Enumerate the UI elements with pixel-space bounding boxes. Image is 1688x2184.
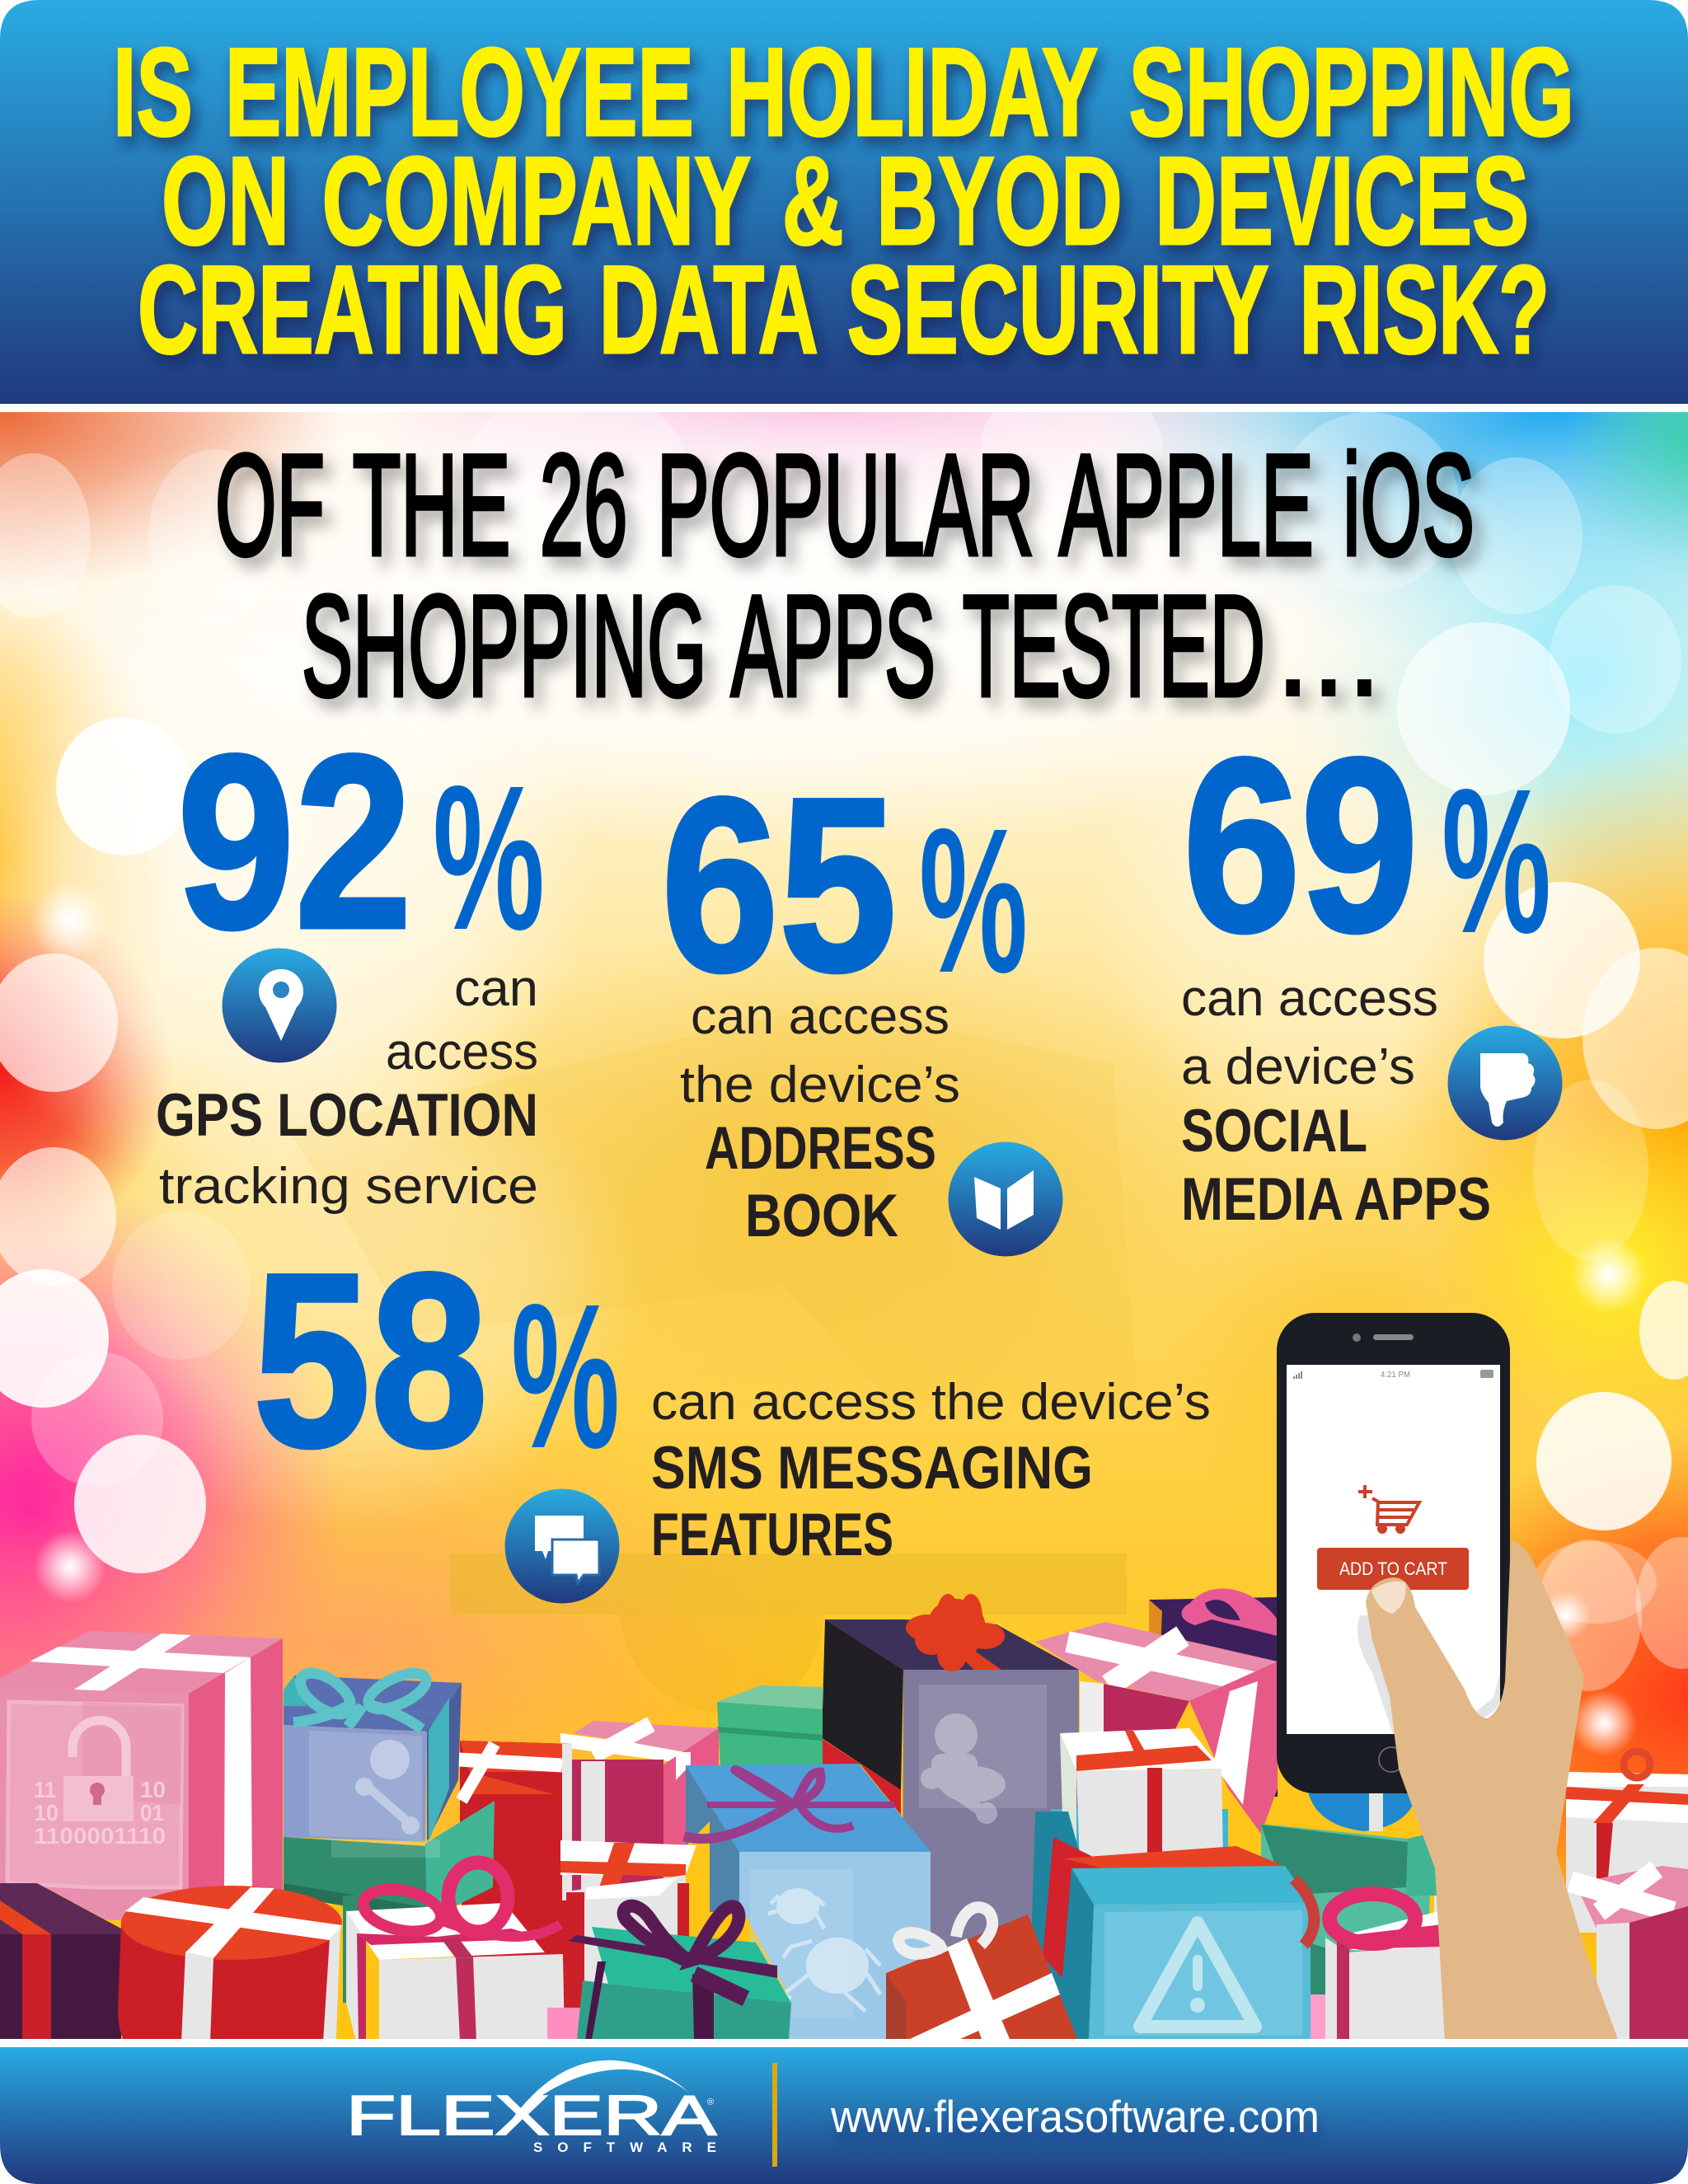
icon: spiders xyxy=(768,1888,880,2011)
icon: purple ribbon bow xyxy=(684,1769,894,1839)
icon: open padlock with binary: 10 xyxy=(140,1777,166,1802)
icon: pink bow xyxy=(359,1863,560,1938)
icon: shopping cart xyxy=(1358,1485,1419,1532)
panel: header band xyxy=(0,0,1688,404)
phone status bar xyxy=(1293,1370,1493,1380)
icon: chat bubbles xyxy=(504,1488,620,1604)
icon: purple bow xyxy=(624,1906,746,1999)
gift: green box purple bow xyxy=(568,1906,791,2040)
gift: purple box xyxy=(0,1883,121,2041)
gift: white pink-ribbon box right xyxy=(1294,1879,1451,2041)
illustration: hand xyxy=(1366,1540,1619,2041)
stat: 69 percent: % xyxy=(1442,746,1551,976)
icon: location pin xyxy=(223,948,336,1063)
stat: 58 percent: % xyxy=(511,1261,620,1491)
text: social media apps xyxy=(1181,970,1491,1233)
gift: blue spider box xyxy=(684,1764,931,2040)
stat: 69 percent xyxy=(1181,706,1563,1233)
illustration: phone xyxy=(1277,1313,1510,1793)
stat: 58 percent xyxy=(253,1221,1211,1604)
icon: teal bow xyxy=(293,1665,431,1729)
text: sms messaging xyxy=(651,1374,1211,1568)
stat: 65 percent: 65 xyxy=(661,746,897,1023)
heading: of the 26 apps: ... xyxy=(1275,566,1382,727)
gift: teal warning box xyxy=(1031,1811,1311,2040)
text: address book: BOOK xyxy=(745,1183,898,1249)
text: gps location: can xyxy=(454,960,538,1017)
stat: 69 percent: 69 xyxy=(1183,706,1418,983)
logo: flexera: SOFTWARE xyxy=(533,2139,716,2155)
gift: green back right xyxy=(1261,1824,1451,1978)
text: social media apps: a device’s xyxy=(1181,1038,1415,1095)
logo: flexera xyxy=(346,2060,717,2155)
gift: white box with red ribbon xyxy=(1051,1728,1228,1896)
icon: open padlock with binary xyxy=(34,1721,166,1849)
gift: white box right edge xyxy=(1566,1751,1688,1896)
panel: gift pile xyxy=(0,1589,1688,2041)
stat: 65 percent: % xyxy=(919,785,1028,1015)
thumb shadow xyxy=(1357,1615,1500,1734)
icon: open padlock with binary: 10 xyxy=(34,1800,59,1825)
title xyxy=(113,22,1574,380)
text: sms messaging: can access the device’s xyxy=(651,1374,1211,1431)
gift: green box under skull xyxy=(284,1801,495,2003)
icon: warning triangle xyxy=(1140,1923,1255,2027)
gift: filler shapes behind pile xyxy=(462,1896,1597,2039)
button: add to cart xyxy=(1317,1548,1469,1590)
thumbnail xyxy=(1372,1582,1405,1614)
stat: 92 percent xyxy=(156,703,545,1215)
gift: pink box with white ribbon xyxy=(1035,1622,1278,1834)
gift: pink crimson box xyxy=(560,1721,719,1901)
icon: book xyxy=(948,1142,1063,1256)
stat: 92 percent: 92 xyxy=(177,703,412,980)
gift: dark skull box xyxy=(821,1619,1079,1961)
button: add to cart: ADD TO CART xyxy=(1339,1558,1447,1579)
text: sms messaging: FEATURES xyxy=(651,1502,893,1568)
gift: pink sliver xyxy=(547,2008,580,2041)
text: gps location: GPS LOCATION xyxy=(156,1082,538,1149)
text: social media apps: can access xyxy=(1181,970,1438,1027)
text: gps location xyxy=(156,960,538,1215)
heading: of the 26 apps xyxy=(215,425,1475,727)
logo: flexera: ® xyxy=(707,2097,714,2107)
gift: large pink lock box xyxy=(0,1631,283,1920)
gift: tilted orange-red box xyxy=(886,1907,1077,2039)
gift: purple box with pink bow xyxy=(1149,1589,1278,1797)
phone status bar: 4:21 PM xyxy=(1381,1371,1410,1380)
gift: blue teal skull box xyxy=(284,1665,462,1858)
gift: white box pink bow xyxy=(346,1863,565,2041)
strip: white divider below gifts xyxy=(0,2039,1688,2047)
icon: open padlock with binary: 01 xyxy=(140,1800,164,1825)
icon: ghost skull xyxy=(331,1740,440,1858)
stat: 92 percent: % xyxy=(433,743,545,972)
text: website url: www.flexerasoftware.com xyxy=(830,2091,1320,2142)
panel: footer band xyxy=(0,2047,1688,2184)
gift: round blue box behind phone xyxy=(1307,1788,1418,1831)
text: sms messaging: SMS MESSAGING xyxy=(651,1435,1093,1502)
icon: skull and bones xyxy=(921,1713,1006,1824)
text: address book: can access xyxy=(691,988,950,1045)
text: gps location: tracking service xyxy=(159,1158,538,1215)
text: address book: ADDRESS xyxy=(705,1115,936,1182)
icon: ribbon swirl xyxy=(1624,1751,1650,1778)
stat: 58 percent: 58 xyxy=(253,1221,488,1498)
icon: red flower bow xyxy=(906,1594,1005,1671)
phone home button xyxy=(1379,1747,1404,1772)
gift: red box xyxy=(458,1741,572,1900)
text: social media apps: SOCIAL xyxy=(1181,1098,1367,1165)
phone earpiece xyxy=(1353,1333,1414,1342)
gift: pink box corner xyxy=(1570,1866,1688,2041)
panel: bokeh background xyxy=(0,412,1688,2039)
footer divider xyxy=(772,2063,777,2167)
text: address book: the device’s xyxy=(680,1057,960,1113)
text: address book xyxy=(680,988,960,1249)
gift: white box red ribbon lower xyxy=(560,1840,696,2011)
icon: open padlock with binary: 1100001110 xyxy=(34,1823,166,1849)
logo: flexera: FLEXERA xyxy=(346,2084,717,2147)
icon: open padlock with binary: 11 xyxy=(34,1777,56,1802)
phone screen xyxy=(1287,1365,1500,1734)
text: social media apps: MEDIA APPS xyxy=(1181,1166,1491,1233)
gift: red round box xyxy=(118,1886,342,2041)
gift: green box xyxy=(717,1685,823,1768)
text: gps location: access xyxy=(386,1024,538,1080)
stat: 65 percent xyxy=(661,746,1063,1256)
icon: thumbs down xyxy=(1447,1025,1563,1141)
